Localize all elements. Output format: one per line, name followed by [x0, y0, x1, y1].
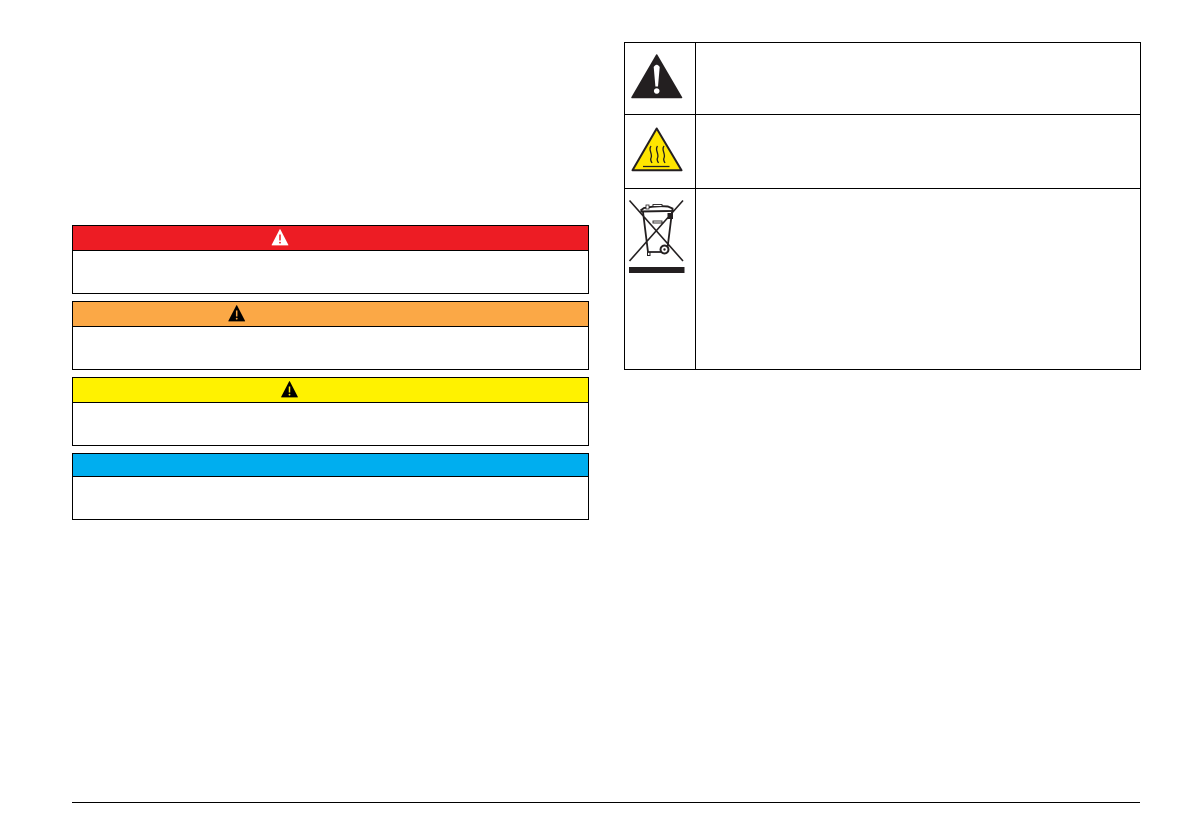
notice body box: [72, 476, 588, 520]
icon: white warning triangle: [272, 230, 288, 245]
icon: black warning triangle: [229, 306, 245, 321]
icon: crossed-out waste bin: [629, 200, 684, 273]
icon: black warning triangle on yellow: [282, 382, 298, 397]
bin wheel: [660, 246, 668, 254]
notice header bar: [72, 454, 588, 476]
panel: symbols table: [624, 42, 1140, 370]
icon: hot surface triangle: [632, 128, 682, 170]
table frame: [624, 42, 1140, 370]
panel: caution notice: [72, 378, 588, 446]
bin body: [643, 212, 672, 252]
cross lines: [630, 200, 683, 261]
warning body box: [72, 326, 588, 370]
bin lid: [640, 206, 672, 212]
panel: notice: [72, 454, 588, 520]
panel: warning notice: [72, 302, 588, 370]
warning header bar: [72, 302, 588, 326]
caution header bar: [72, 378, 588, 402]
solid bar: [629, 267, 684, 273]
caution body box: [72, 402, 588, 446]
danger header bar: [72, 226, 588, 250]
footer rule: [72, 802, 1140, 803]
danger body box: [72, 250, 588, 294]
panel: danger notice: [72, 226, 588, 294]
icon: general hazard triangle: [632, 55, 682, 98]
